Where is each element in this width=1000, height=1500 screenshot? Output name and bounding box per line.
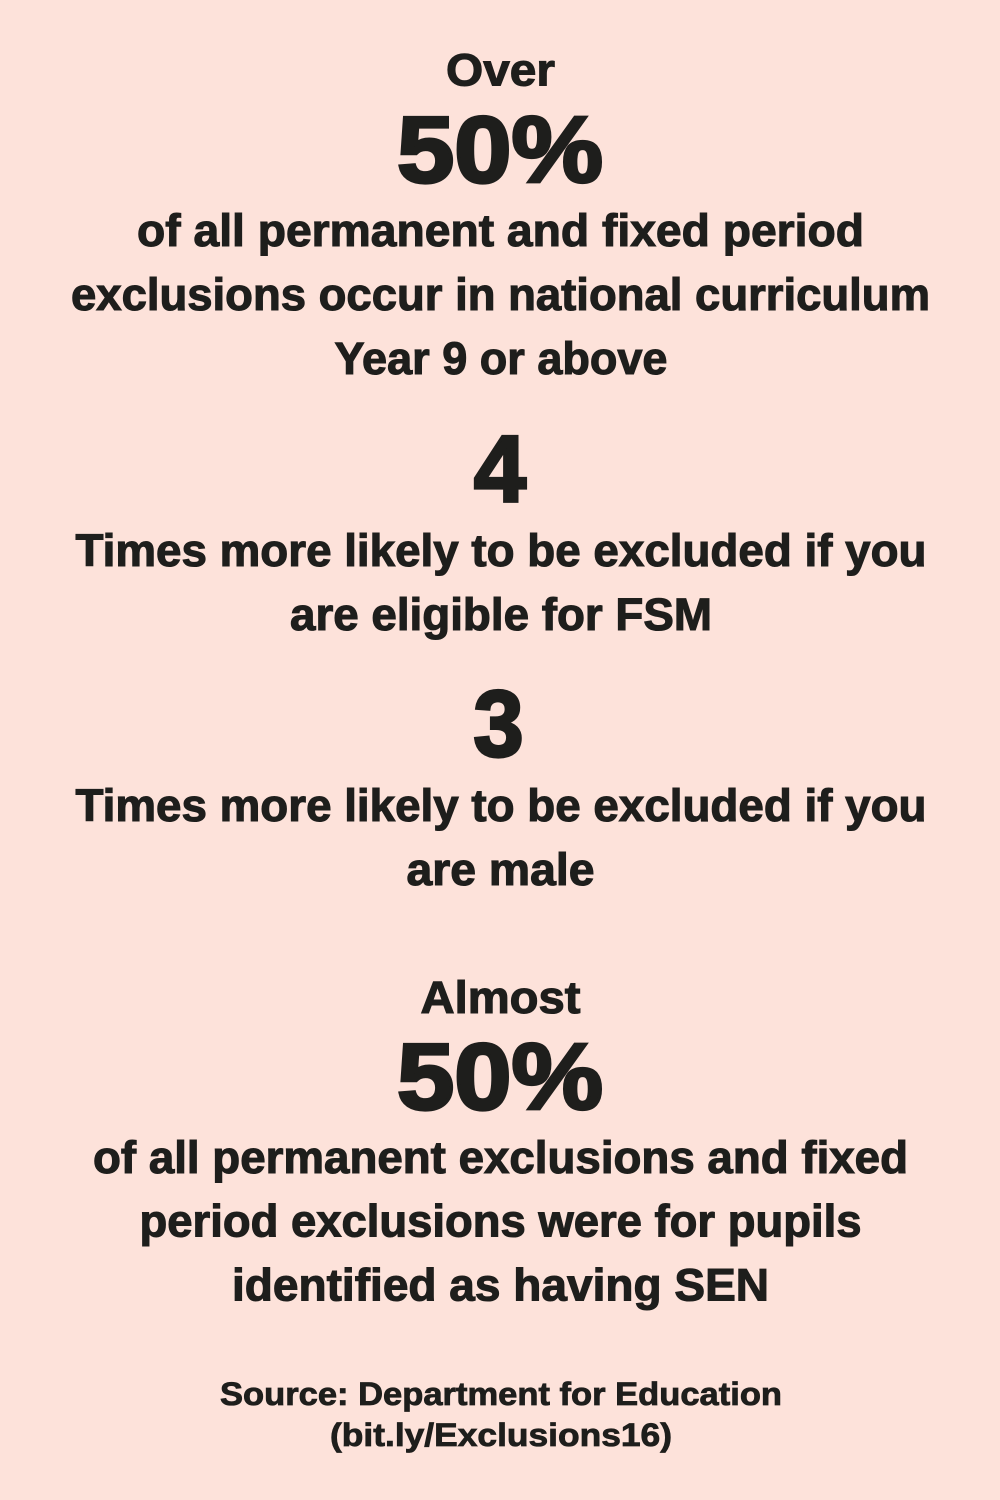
statistic: 3 times, male: [76, 671, 926, 895]
statistic: almost 50 percent, SEN: [93, 972, 908, 1310]
description: FSM: are eligible for FSM: [290, 589, 712, 640]
source note: Source: Department for Education: [220, 1376, 782, 1412]
big number: 4: 4: [474, 416, 526, 521]
lead-in: Over: Over: [446, 44, 555, 96]
description: FSM: Times more likely to be excluded if you: [76, 525, 926, 576]
description: male: Times more likely to be excluded if you: [76, 780, 926, 831]
description: SEN: identified as having SEN: [232, 1260, 769, 1310]
description: Year 9 exclusions: [71, 205, 930, 384]
big number: 3: 3: [474, 671, 524, 776]
source note: [220, 1376, 782, 1453]
big number: 50%: 50%: [397, 1024, 603, 1129]
statistic: 4 times, FSM: [76, 416, 926, 640]
description: Year 9 exclusions: exclusions occur in national curriculum: [71, 269, 930, 320]
statistic: over 50 percent, Year 9 or above: [71, 44, 930, 384]
description: Year 9 exclusions: of all permanent and fixed period: [137, 205, 864, 256]
description: male: [76, 780, 926, 895]
description: male: are male: [406, 844, 594, 895]
source note: (bit.ly/Exclusions16): [330, 1417, 672, 1453]
description: Year 9 exclusions: Year 9 or above: [334, 333, 668, 384]
description: SEN: [93, 1132, 908, 1310]
description: FSM: [76, 525, 926, 640]
lead-in: Almost: Almost: [420, 972, 581, 1023]
big number: 50%: 50%: [397, 97, 603, 202]
description: SEN: of all permanent exclusions and fixed: [93, 1132, 908, 1183]
description: SEN: period exclusions were for pupils: [140, 1196, 861, 1246]
